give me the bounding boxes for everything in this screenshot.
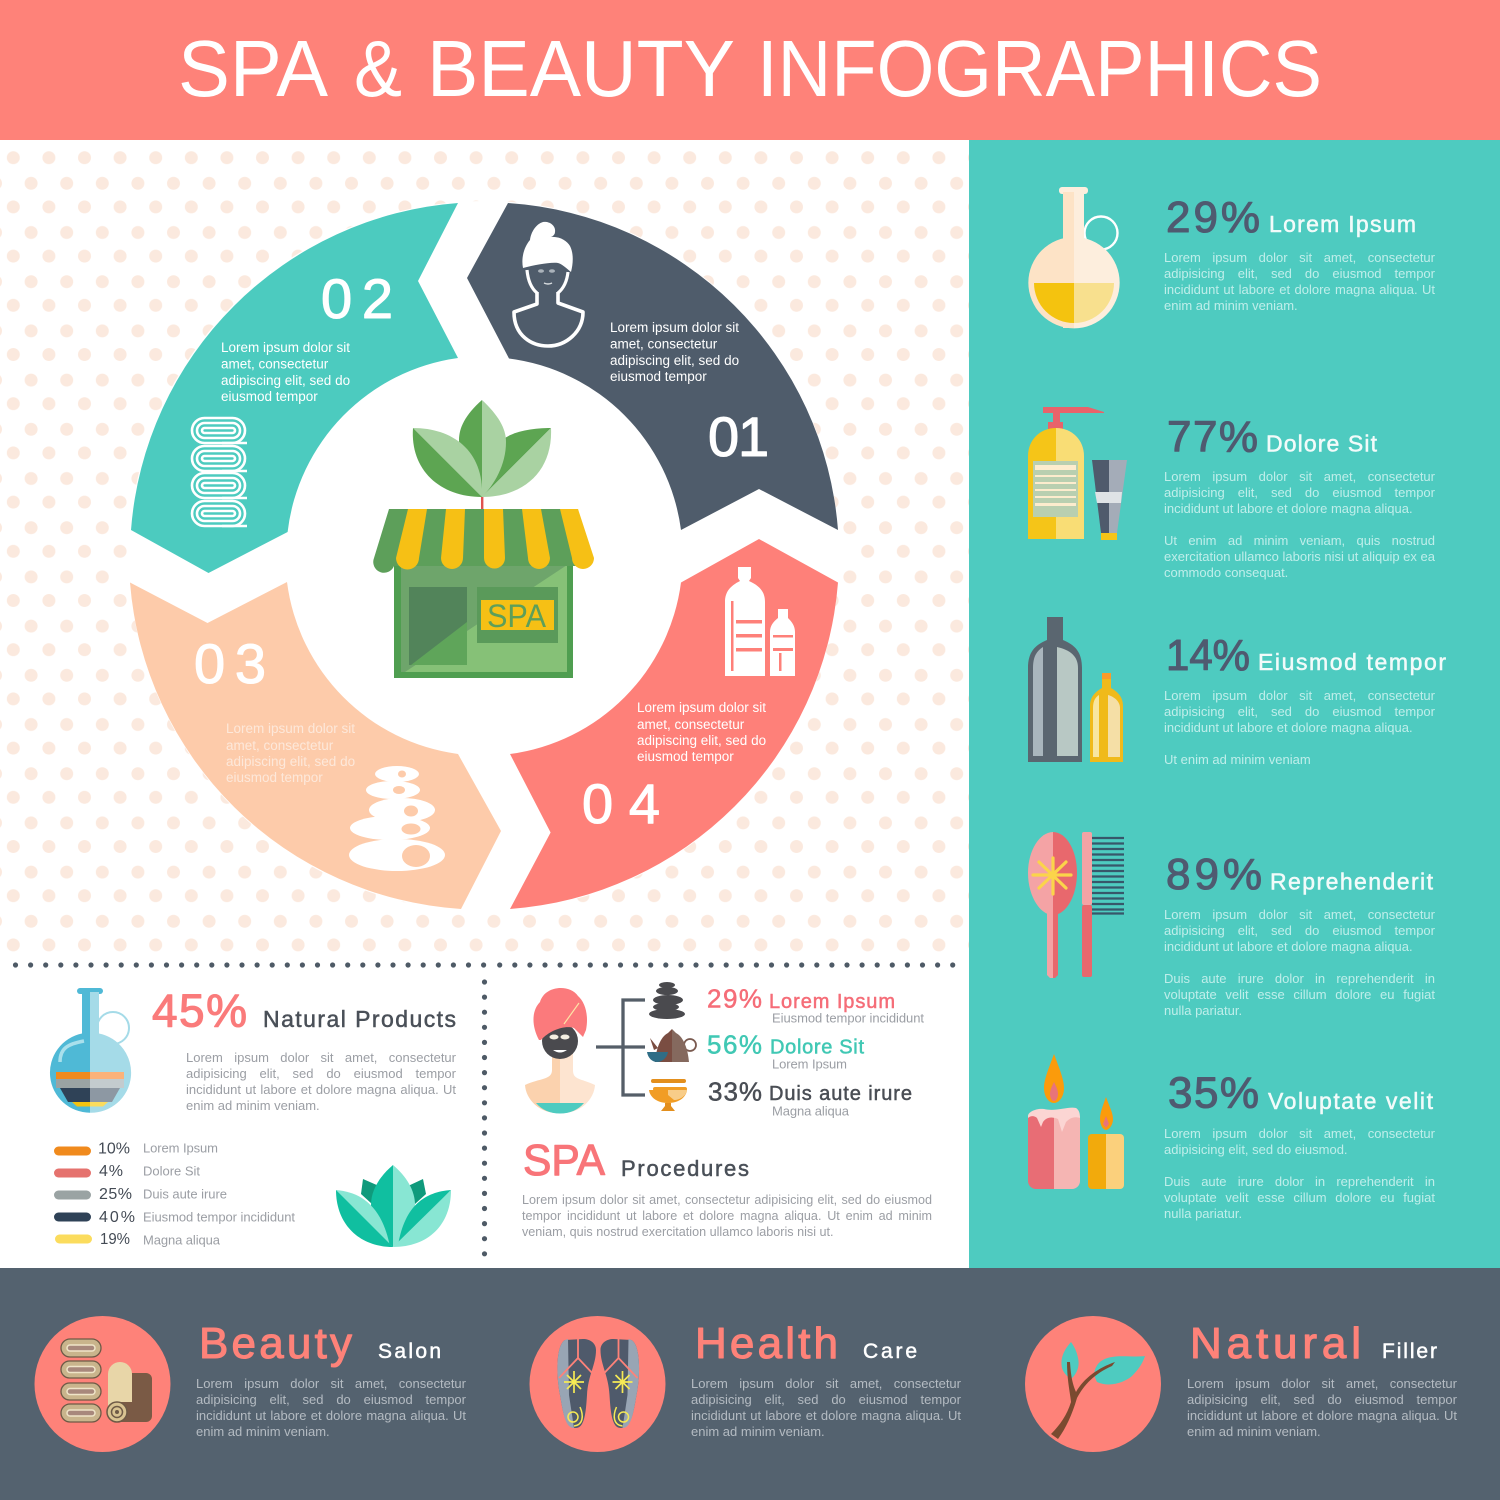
- description: Lorem ipsum dolor sit amet, consectetur: [691, 1376, 961, 1391]
- footer item: Natural Filler: Filler: [1382, 1340, 1437, 1363]
- percentage: 35%: [1168, 1068, 1259, 1118]
- description: Duis aute irure dolor in reprehenderit in: [1164, 971, 1435, 986]
- legend: Eiusmod tempor incididunt: [143, 1210, 295, 1224]
- segment 01 text: eiusmod tempor: [610, 369, 707, 384]
- stat row: 35% Voluptate velit: [1028, 1054, 1435, 1224]
- item 56%: [707, 1030, 864, 1072]
- description: enim ad minim veniam.: [1187, 1424, 1321, 1439]
- description: Lorem ipsum dolor sit amet, consectetur adipisicing elit, sed do eiusmod: [522, 1193, 932, 1207]
- item 33%: 33%: [708, 1076, 762, 1106]
- segment 03 text: amet, consectetur: [226, 738, 334, 753]
- subtitle: Voluptate velit: [1268, 1088, 1434, 1114]
- footer item: Health Care: [530, 1316, 961, 1452]
- description: exercitation ullamco laboris nisi ut aliquip ex ea: [1164, 549, 1435, 564]
- footer item: Beauty Salon: Beauty: [199, 1319, 352, 1368]
- description: [1164, 688, 1435, 770]
- icon: sprout: [1025, 1316, 1161, 1452]
- description: Lorem ipsum dolor sit amet, consectetur: [186, 1050, 456, 1065]
- legend: 19%: [100, 1231, 130, 1248]
- footer item: Health Care: Care: [863, 1340, 917, 1363]
- description: Lorem ipsum dolor sit amet, consectetur: [196, 1376, 466, 1391]
- footer item: Natural Filler: Natural: [1190, 1319, 1361, 1368]
- description: [196, 1376, 466, 1442]
- item 29%: Lorem Ipsum: [769, 991, 895, 1013]
- segment 02 number: 02: [321, 267, 393, 330]
- segment 02 text: adipiscing elit, sed do: [221, 373, 350, 388]
- item 56%: Dolore Sit: [770, 1036, 864, 1058]
- legend: Duis aute irure: [143, 1186, 227, 1202]
- description: adipisicing elit, sed do eiusmod tempor: [691, 1392, 961, 1407]
- leaves: [413, 400, 551, 510]
- panel: bottom footer: [0, 1268, 1500, 1500]
- description: enim ad minim veniam.: [691, 1424, 825, 1439]
- description: Lorem ipsum dolor sit amet, consectetur: [1164, 1126, 1435, 1141]
- percentage: 89%: [1166, 850, 1262, 899]
- description: incididunt ut labore et dolore magna aliqua. Ut: [1164, 282, 1435, 297]
- description: adipisicing elit, sed do eiusmod tempor: [196, 1392, 466, 1407]
- description: commodo consequat.: [1164, 565, 1288, 580]
- connector bracket: [596, 1000, 645, 1095]
- segment 04 text: eiusmod tempor: [637, 749, 734, 764]
- description: [186, 1050, 456, 1116]
- segment 04 text: Lorem ipsum dolor sit: [637, 700, 766, 715]
- item 56%: 56%: [707, 1030, 762, 1060]
- panel: natural products: [50, 984, 456, 1248]
- shop sign: SPA: [487, 598, 547, 634]
- description: nulla pariatur.: [1164, 1206, 1242, 1221]
- description: Lorem ipsum dolor sit amet, consectetur: [1164, 907, 1435, 922]
- description: [691, 1376, 961, 1442]
- description: enim ad minim veniam.: [186, 1098, 320, 1113]
- description: voluptate velit esse cillum dolore eu fugiat: [1164, 987, 1435, 1002]
- description: Ut enim ad minim veniam, quis nostrud: [1164, 533, 1435, 548]
- segment 03 text: adipiscing elit, sed do: [226, 754, 355, 769]
- legend: Magna aliqua: [143, 1232, 221, 1248]
- title: BEAUTY: [427, 24, 735, 113]
- description: Lorem ipsum dolor sit amet, consectetur: [1164, 469, 1435, 484]
- icon: hair brush and comb: [1028, 832, 1124, 978]
- item 29%: [707, 984, 924, 1026]
- description: [1187, 1376, 1457, 1442]
- icon: candles: [1028, 1054, 1124, 1189]
- legend: 25%: [99, 1186, 132, 1203]
- description: veniam, quis nostrud exercitation ullamco laboris nisi ut.: [522, 1225, 834, 1239]
- segment 02 text: Lorem ipsum dolor sit: [221, 340, 350, 355]
- icon: flip flops: [530, 1316, 666, 1452]
- description: adipisicing elit, sed do eiusmod.: [1164, 1142, 1348, 1157]
- legend: 10%: [98, 1140, 130, 1158]
- icon: mortar: [649, 1079, 687, 1111]
- segment 01: [467, 203, 838, 530]
- segment 04 number: 04: [582, 772, 660, 835]
- stat row: 29% Lorem Ipsum: [1028, 187, 1435, 328]
- legend: 40%: [99, 1209, 135, 1226]
- title: &: [354, 24, 402, 113]
- item 29%: Eiusmod tempor incididunt: [772, 1010, 924, 1026]
- description: Lorem ipsum dolor sit amet, consectetur: [1164, 250, 1435, 265]
- item 56%: Lorem Ipsum: [772, 1056, 847, 1072]
- description: adipisicing elit, sed do eiusmod tempor: [1187, 1392, 1457, 1407]
- stat row: 77% Dolore Sit: [1028, 407, 1435, 583]
- percentage: 14%: [1166, 631, 1250, 680]
- heading: Procedures: Procedures: [621, 1156, 749, 1181]
- description: voluptate velit esse cillum dolore eu fugiat: [1164, 1190, 1435, 1205]
- segment 03 text: Lorem ipsum dolor sit: [226, 721, 355, 736]
- building: [394, 565, 573, 678]
- footer item: Beauty Salon: [34, 1316, 466, 1452]
- icon: towels and roll: [34, 1316, 170, 1452]
- title: SPA: [178, 24, 329, 113]
- description: adipisicing elit, sed do eiusmod tempor: [1164, 485, 1435, 500]
- description: Lorem ipsum dolor sit amet, consectetur: [1187, 1376, 1457, 1391]
- footer item: Beauty Salon: Salon: [378, 1340, 441, 1363]
- description: [1164, 907, 1435, 1021]
- icon: spa shop: [373, 400, 594, 678]
- circular diagram: [130, 203, 838, 909]
- description: [522, 1192, 932, 1242]
- item 33%: [708, 1076, 912, 1118]
- icon: teapot: [647, 1029, 696, 1062]
- description: incididunt ut labore et dolore magna aliqua.: [1164, 720, 1413, 735]
- description: [1164, 469, 1435, 583]
- description: incididunt ut labore et dolore magna aliqua. Ut: [691, 1408, 961, 1423]
- awning: [373, 509, 594, 573]
- description: incididunt ut labore et dolore magna aliqua. Ut: [196, 1408, 466, 1423]
- description: adipisicing elit, sed do eiusmod tempor: [1164, 923, 1435, 938]
- segment 01 text: amet, consectetur: [610, 336, 718, 352]
- item 33%: Duis aute irure: [769, 1083, 912, 1105]
- icon: grey and yellow bottles: [1028, 617, 1123, 762]
- title: INFOGRAPHICS: [757, 24, 1322, 113]
- segment 01 text: Lorem ipsum dolor sit: [610, 320, 739, 335]
- header banner: [0, 0, 1500, 140]
- stat row: 14% Eiusmod tempor: [1028, 617, 1446, 770]
- icon: lotus: [336, 1165, 451, 1247]
- icon: stacked stones: [349, 766, 445, 871]
- description: nulla pariatur.: [1164, 1003, 1242, 1018]
- description: incididunt ut labore et dolore magna aliqua. Ut: [186, 1082, 456, 1097]
- item 33%: Magna aliqua: [772, 1104, 850, 1118]
- description: incididunt ut labore et dolore magna aliqua.: [1164, 939, 1413, 954]
- subtitle: Lorem Ipsum: [1269, 211, 1416, 237]
- description: enim ad minim veniam.: [1164, 298, 1298, 313]
- panel: spa procedures: [522, 982, 932, 1242]
- segment 04 text: amet, consectetur: [637, 717, 745, 732]
- panel: right statistics: [969, 140, 1500, 1268]
- percentage: 29%: [1166, 193, 1260, 242]
- description: adipisicing elit, sed do eiusmod tempor: [1164, 266, 1435, 281]
- segment 03 number: 03: [194, 632, 266, 695]
- segment 04: [510, 539, 838, 909]
- stat row: 89% Reprehenderit: [1028, 832, 1435, 1021]
- percentage: 77%: [1167, 412, 1258, 462]
- description: adipisicing elit, sed do eiusmod tempor: [1164, 704, 1435, 719]
- dotted background panel: [0, 143, 969, 955]
- heading: SPA: SPA: [523, 1136, 606, 1185]
- legend: Lorem Ipsum: [143, 1140, 218, 1156]
- segment 01 text: adipiscing elit, sed do: [610, 353, 739, 368]
- description: adipisicing elit, sed do eiusmod tempor: [186, 1066, 456, 1081]
- icon: pump bottle and tube: [1028, 407, 1127, 540]
- segment 02 text: amet, consectetur: [221, 356, 329, 372]
- description: [1164, 1126, 1435, 1224]
- segment 02: [131, 203, 458, 573]
- segment 04 text: adipiscing elit, sed do: [637, 733, 766, 748]
- icon: blue flask: [50, 988, 131, 1113]
- description: [1164, 250, 1435, 316]
- icon: woman with towel: [514, 222, 583, 346]
- icon: yellow flask: [1028, 187, 1120, 328]
- description: Ut enim ad minim veniam: [1164, 752, 1311, 767]
- icon: stones: [649, 982, 685, 1019]
- icon: bottles: [725, 567, 795, 676]
- segment 03: [130, 582, 501, 909]
- footer item: Natural Filler: [1025, 1316, 1457, 1452]
- segment 02 text: eiusmod tempor: [221, 389, 318, 404]
- icon: rolled towels: [192, 418, 247, 526]
- description: tempor incididunt ut labore et dolore magna aliqua. Ut enim ad minim: [522, 1209, 932, 1223]
- description: incididunt ut labore et dolore magna aliqua. Ut: [1187, 1408, 1457, 1423]
- item 29%: 29%: [707, 984, 762, 1014]
- heading: Natural Products: [263, 1006, 456, 1032]
- legend: [54, 1140, 295, 1248]
- icon: woman with face mask: [525, 988, 595, 1114]
- description: Duis aute irure dolor in reprehenderit in: [1164, 1174, 1435, 1189]
- segment 01 number: 01: [708, 405, 769, 468]
- subtitle: Dolore Sit: [1266, 430, 1378, 456]
- percentage: 45%: [152, 984, 247, 1036]
- description: enim ad minim veniam.: [196, 1424, 330, 1439]
- subtitle: Reprehenderit: [1270, 868, 1434, 894]
- description: incididunt ut labore et dolore magna aliqua.: [1164, 501, 1413, 516]
- description: Lorem ipsum dolor sit amet, consectetur: [1164, 688, 1435, 703]
- legend: 4%: [99, 1163, 123, 1180]
- title: [178, 24, 1322, 113]
- footer item: Health Care: Health: [695, 1319, 838, 1368]
- segment 03 text: eiusmod tempor: [226, 770, 323, 785]
- subtitle: Eiusmod tempor: [1258, 649, 1446, 675]
- legend: Dolore Sit: [143, 1164, 200, 1178]
